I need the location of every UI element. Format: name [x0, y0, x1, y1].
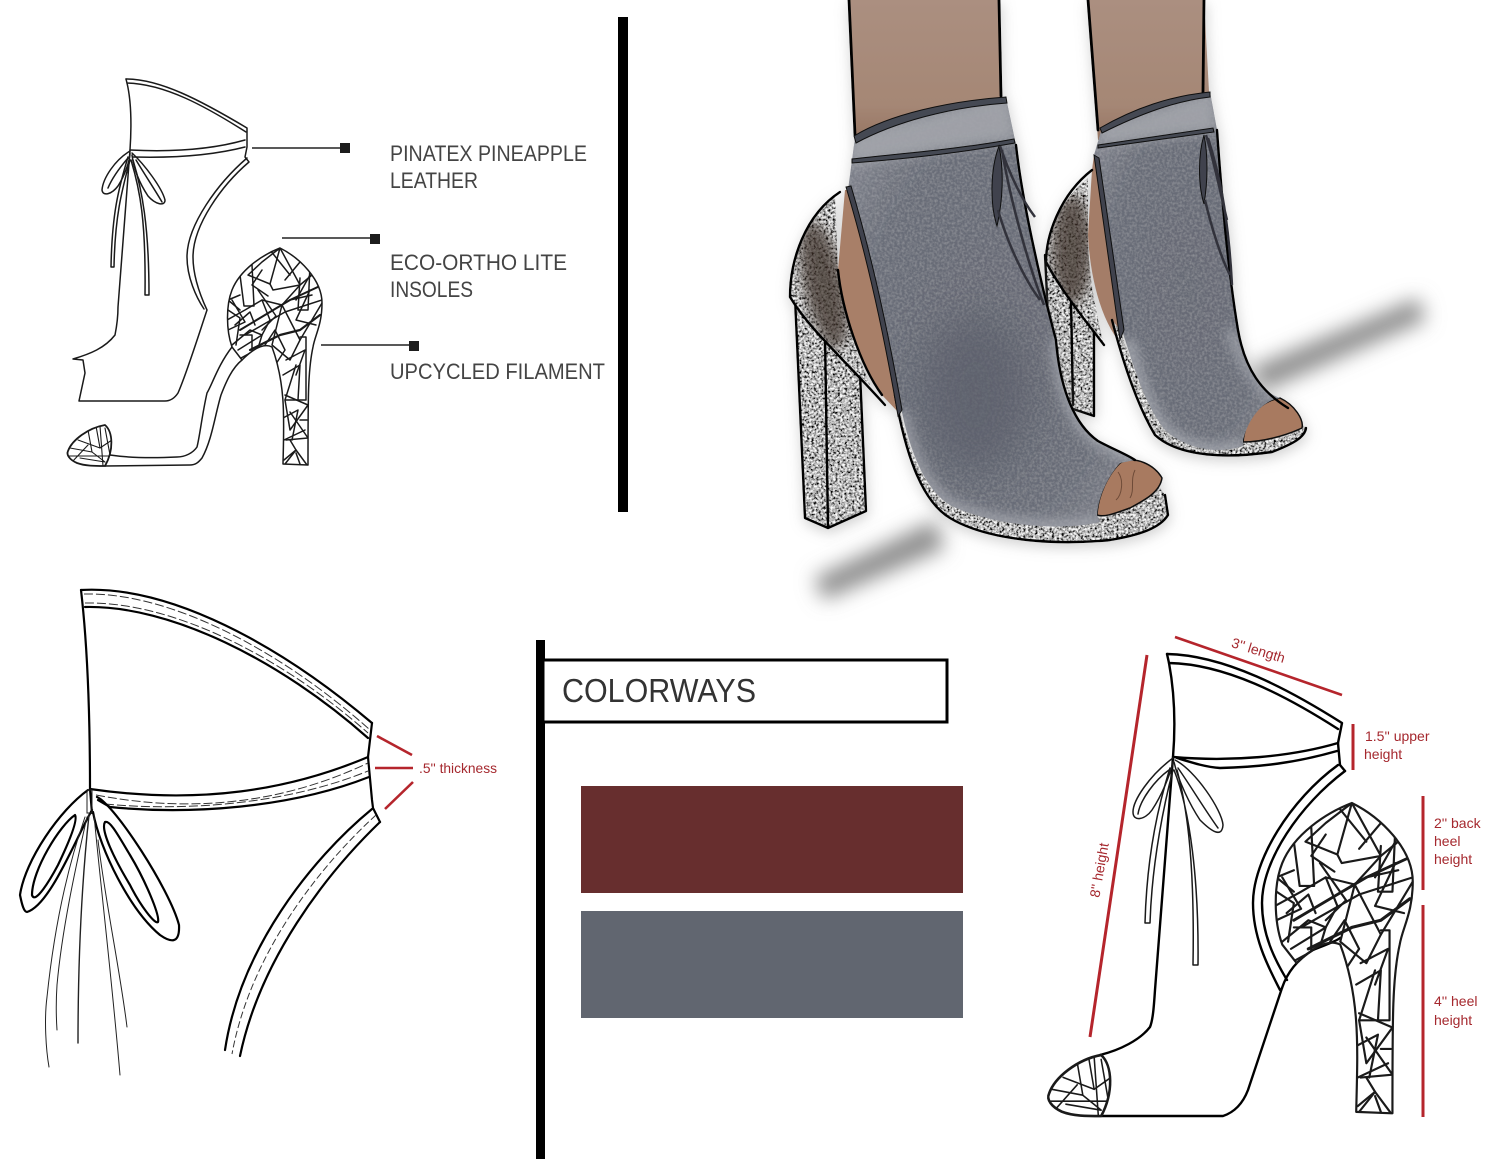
vertical bar — [536, 640, 545, 1159]
dimension: heel height: 4'' heel — [1434, 993, 1478, 1009]
dimension: 8 inch height — [1086, 655, 1147, 1037]
front upper — [848, 98, 1135, 527]
rear heel — [1045, 255, 1094, 416]
tie ends — [46, 815, 127, 1075]
bow loops — [20, 790, 179, 940]
callout: filament: UPCYCLED FILAMENT — [390, 359, 605, 384]
panel: measurement drawing — [1048, 635, 1482, 1117]
rear upper — [1094, 92, 1280, 450]
dimension: back heel height: height — [1434, 851, 1472, 867]
rear boot — [1045, 0, 1306, 455]
cast shadows — [814, 298, 1426, 600]
panel: material callout diagram — [67, 79, 605, 466]
front boot — [790, 0, 1168, 542]
divider bar — [618, 17, 628, 512]
callout: pineapple leather: LEATHER — [390, 168, 478, 193]
ankle band with stitching — [90, 757, 369, 810]
shoe line drawing: top-left boot — [67, 79, 322, 466]
dimension: back heel height: 2'' back — [1434, 815, 1482, 831]
dimension: upper height: 1.5'' upper — [1365, 728, 1430, 744]
dimension: back heel height: heel — [1434, 833, 1460, 849]
callout: pineapple leather: PINATEX PINEAPPLE — [390, 141, 587, 166]
callout: insoles — [282, 234, 567, 302]
thickness annotation — [375, 736, 497, 809]
bow and ties — [1133, 758, 1173, 819]
panel: collar detail drawing — [20, 590, 497, 1075]
dimension: 8 inch height: 8'' height — [1086, 841, 1112, 899]
filament heel — [1275, 803, 1413, 1113]
dimension: heel height — [1423, 905, 1478, 1117]
callout: insoles: ECO-ORTHO LITE — [390, 250, 567, 275]
callout: pineapple leather — [252, 141, 587, 193]
front bow — [992, 146, 1002, 226]
front sole — [895, 395, 1168, 542]
filament toe — [1048, 1055, 1111, 1116]
illustration: rendered boots on legs — [790, 0, 1426, 600]
dimension: upper height — [1353, 724, 1430, 770]
rear toes — [1243, 398, 1302, 442]
arch sole — [110, 347, 232, 458]
rear counter — [1046, 178, 1104, 345]
bow — [102, 151, 130, 194]
front toes — [1097, 460, 1162, 516]
swatch: burgundy — [581, 786, 963, 893]
thickness annotation: .5'' thickness — [419, 760, 497, 776]
dimension: upper height: height — [1364, 746, 1402, 762]
collar strap with stitching — [81, 590, 380, 822]
collar trim — [854, 97, 1007, 143]
swatch: slate grey — [581, 911, 963, 1018]
front counter — [790, 196, 870, 385]
panel: colorways — [536, 640, 963, 1159]
front heel — [795, 298, 866, 528]
heading box: COLORWAYS — [562, 672, 756, 709]
rear sole — [1112, 320, 1306, 455]
dimension: 3 inch length — [1175, 635, 1342, 695]
back strip — [225, 809, 380, 1056]
skin opening — [838, 190, 898, 412]
callout: filament — [321, 341, 605, 384]
rear bow — [1200, 135, 1207, 204]
dimension: heel height: height — [1434, 1012, 1472, 1028]
dimension: back heel height — [1423, 796, 1482, 890]
boot outline — [1048, 654, 1413, 1116]
strap — [846, 186, 902, 416]
heading box — [543, 660, 947, 722]
callout: insoles: INSOLES — [390, 277, 473, 302]
dimension: 3 inch length: 3'' length — [1230, 635, 1287, 666]
